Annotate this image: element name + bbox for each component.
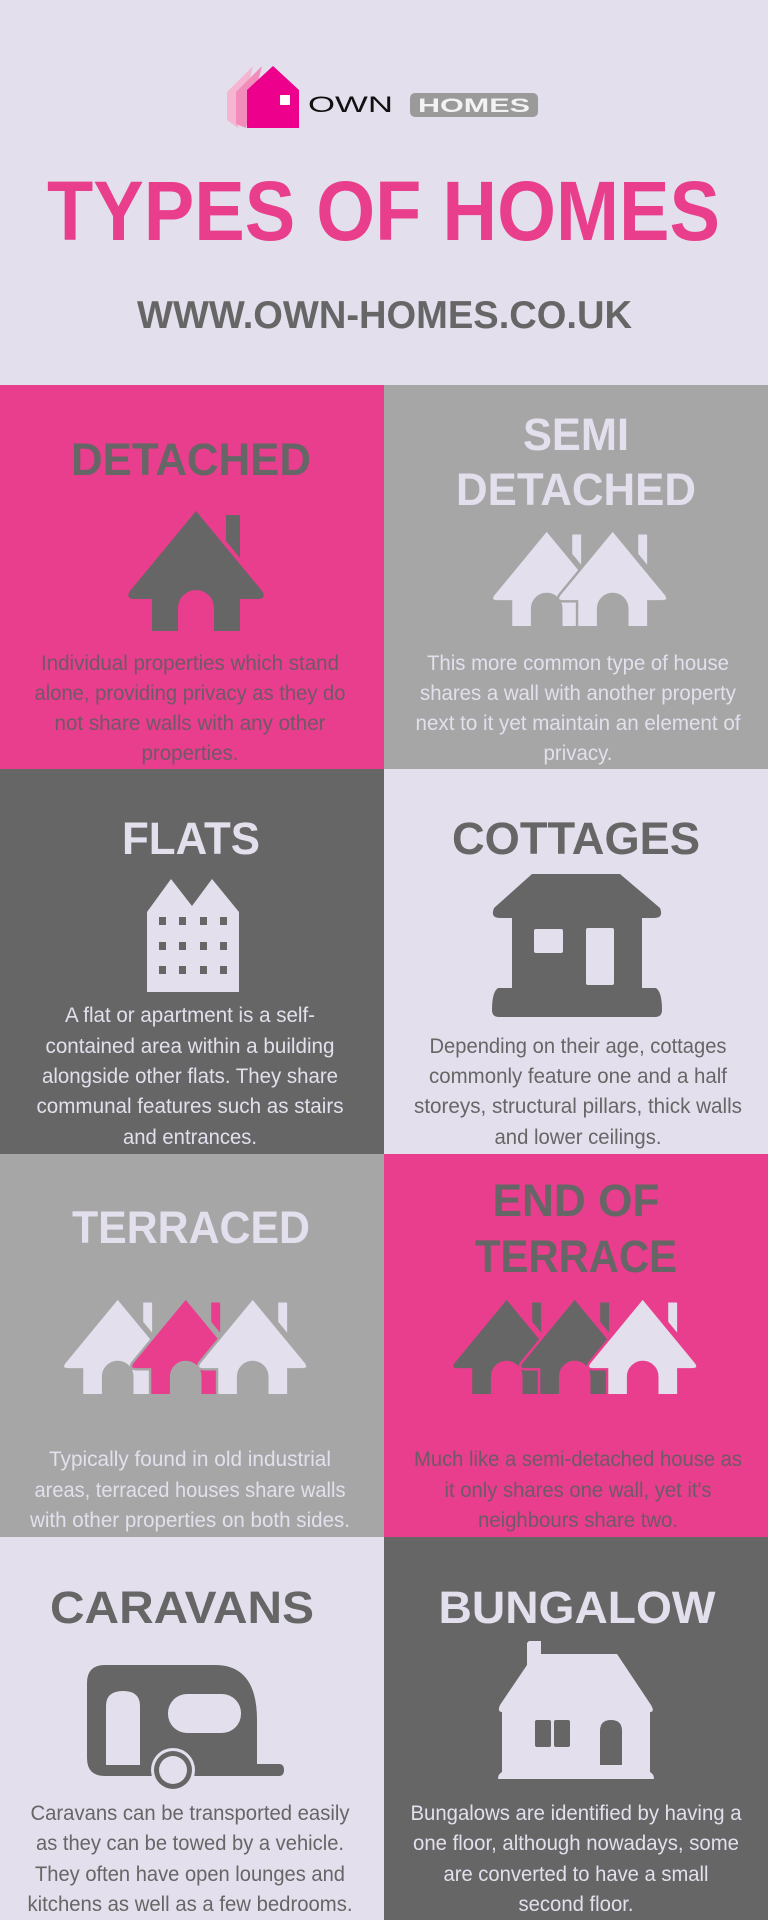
text: flats description: A flat or apartment is a self- bbox=[65, 1004, 315, 1027]
icon: semi detached houses bbox=[492, 530, 668, 627]
text: semi description: privacy. bbox=[544, 742, 612, 765]
text: detached description bbox=[34, 652, 346, 765]
icon: detached house bbox=[128, 511, 264, 631]
logo: OWN bbox=[308, 92, 393, 117]
panel: end of terrace: TERRACE bbox=[475, 1231, 677, 1282]
text: cottages description bbox=[414, 1035, 742, 1149]
text: flats description: alongside other flats. They share bbox=[42, 1065, 338, 1088]
text: cottages description: and lower ceilings. bbox=[494, 1126, 662, 1149]
panel: cottages bbox=[384, 769, 768, 1154]
icon: bungalow bbox=[498, 1641, 654, 1779]
icon: caravan bbox=[87, 1665, 284, 1792]
panel: cottages: COTTAGES bbox=[452, 813, 700, 864]
text: caravans description: kitchens as well as a few bedrooms. bbox=[28, 1893, 352, 1916]
text: cottages description: commonly feature one and a half bbox=[429, 1065, 727, 1088]
panel: terraced: TERRACED bbox=[72, 1202, 310, 1253]
text: detached description: properties. bbox=[142, 742, 238, 765]
text: flats description bbox=[36, 1004, 344, 1149]
panel: semi detached: SEMI bbox=[523, 409, 629, 460]
text: terraced description: Typically found in old industrial bbox=[49, 1448, 331, 1471]
text: caravans description: as they can be towed by a vehicle. bbox=[36, 1832, 344, 1855]
panel: semi detached bbox=[384, 385, 768, 769]
text: end of terrace description: Much like a semi-detached house as bbox=[414, 1448, 742, 1471]
text: bungalow description: are converted to have a small bbox=[444, 1863, 708, 1886]
text: cottages description: storeys, structural pillars, thick walls bbox=[414, 1095, 742, 1118]
text: bungalow description: second floor. bbox=[518, 1893, 634, 1916]
website url: WWW.OWN-HOMES.CO.UK bbox=[137, 294, 632, 337]
icon: cottage bbox=[492, 874, 662, 1017]
icon: flats building bbox=[147, 879, 239, 992]
text: semi description: This more common type of house bbox=[427, 652, 729, 675]
text: detached description: alone, providing privacy as they do bbox=[34, 682, 346, 705]
text: bungalow description: one floor, although nowadays, some bbox=[413, 1832, 739, 1855]
logo: HOMES bbox=[418, 96, 530, 117]
text: terraced description: areas, terraced houses share walls bbox=[34, 1479, 346, 1502]
logo bbox=[227, 66, 538, 128]
panel: bungalow bbox=[384, 1537, 768, 1920]
text: terraced description bbox=[29, 1448, 350, 1532]
text: end of terrace description bbox=[414, 1448, 742, 1532]
panel: detached: DETACHED bbox=[71, 434, 311, 485]
panel: detached bbox=[0, 385, 384, 769]
panel: flats: FLATS bbox=[122, 813, 260, 864]
text: flats description: contained area within a building bbox=[46, 1035, 334, 1058]
icon: end of terrace houses bbox=[452, 1298, 698, 1395]
panel: caravans bbox=[0, 1537, 384, 1920]
panel: end of terrace bbox=[384, 1154, 768, 1537]
text: caravans description: They often have open lounges and bbox=[35, 1863, 345, 1886]
text: caravans description: Caravans can be transported easily bbox=[30, 1802, 350, 1825]
text: end of terrace description: neighbours share two. bbox=[478, 1509, 678, 1532]
text: semi description: shares a wall with another property bbox=[420, 682, 736, 705]
text: semi description bbox=[416, 652, 741, 765]
panel: flats bbox=[0, 769, 384, 1154]
text: detached description: not share walls with any other bbox=[54, 712, 326, 735]
panel: end of terrace: END OF bbox=[492, 1175, 660, 1226]
text: terraced description: with other properties on both sides. bbox=[29, 1509, 350, 1532]
header background bbox=[0, 0, 768, 385]
text: flats description: communal features such as stairs bbox=[36, 1095, 344, 1118]
text: bungalow description: Bungalows are identified by having a bbox=[410, 1802, 742, 1825]
panel: terraced bbox=[0, 1154, 384, 1537]
text: detached description: Individual properties which stand bbox=[41, 652, 339, 675]
icon: terraced houses bbox=[63, 1298, 308, 1395]
text: caravans description bbox=[28, 1802, 352, 1916]
panel: semi detached: DETACHED bbox=[456, 464, 696, 515]
text: flats description: and entrances. bbox=[123, 1126, 257, 1149]
text: bungalow description bbox=[410, 1802, 742, 1916]
panel: caravans: CARAVANS bbox=[50, 1582, 314, 1633]
panel: bungalow: BUNGALOW bbox=[438, 1582, 716, 1633]
text: end of terrace description: it only shares one wall, yet it's bbox=[444, 1479, 712, 1502]
text: cottages description: Depending on their age, cottages bbox=[430, 1035, 726, 1058]
text: semi description: next to it yet maintain an element of bbox=[416, 712, 741, 735]
